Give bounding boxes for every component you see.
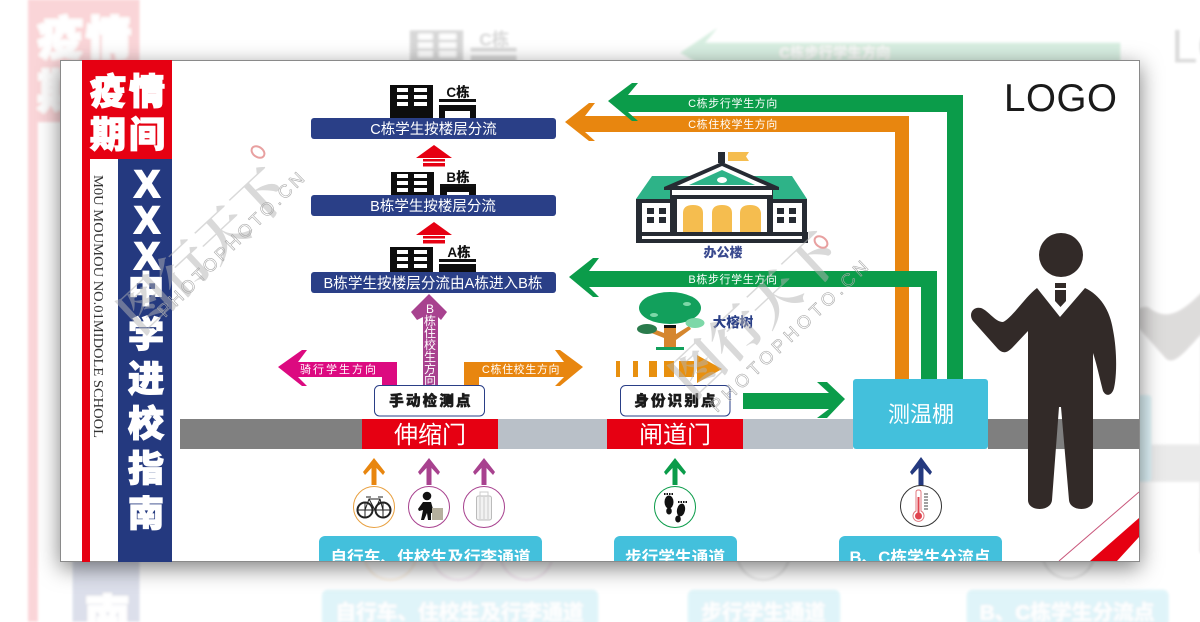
LOGO: LOGO (1004, 77, 1117, 120)
channel: 步行学生通道: 步行学生通道 (625, 547, 725, 567)
arrow: C栋步行 long green route (565, 83, 963, 379)
icon: office building (636, 152, 808, 260)
background: enlarged faded copy of the board: C栋步行学生方向 (780, 46, 891, 61)
arrow: temperature up (910, 457, 932, 486)
channel: 步行学生通道 (614, 536, 737, 561)
background: enlarged faded copy of the board: 疫 (38, 15, 83, 64)
arrow: B栋住校生方向: 栋 (424, 313, 436, 328)
identity check point (620, 386, 730, 416)
sidebar heading: 疫情期间: 疫 (90, 71, 126, 112)
sidebar title: XXX中学进校指南: 指 (128, 448, 164, 489)
icon: footprints (654, 486, 696, 528)
sidebar title: XXX中学进校指南: 进 (128, 358, 164, 399)
building B with label bar (311, 169, 556, 216)
sidebar title: XXX中学进校指南: 南 (128, 493, 164, 534)
watermark 2: 图行天下 (661, 225, 853, 409)
board panel (60, 60, 1140, 562)
arrow: up to building C (416, 145, 452, 166)
gate: 伸缩门 (362, 419, 498, 449)
label: C栋学生按楼层分流 (311, 118, 556, 139)
icon: building A (390, 244, 476, 272)
sidebar english school name: M0U MOUMOU NO.01MIDOLE SCHOOL (91, 175, 106, 438)
sidebar title: XXX中学进校指南: 校 (128, 403, 164, 444)
gate: 伸缩门: 伸缩门 (394, 422, 466, 449)
manual check point: 手动检测点 (389, 392, 473, 410)
channel: 自行车、住校生及行李通道 (319, 536, 542, 561)
arrow: B栋住校生方向: 方 (424, 361, 436, 376)
channel: 自行车、住校生及行李通道: 自行车、住校生及行李通道 (330, 547, 531, 567)
icon: banyan tree (637, 292, 754, 350)
arrow: C栋住校生方向: C栋住校生方向 (482, 362, 560, 376)
label: 大榕树: 大榕树 (713, 314, 754, 330)
icon: thermometer (900, 486, 942, 526)
label: B栋学生按楼层分流由A栋进入B栋: B栋学生按楼层分流由A栋进入B栋 (324, 274, 542, 292)
sidebar title: XXX中学进校指南: X (134, 236, 160, 278)
arrow: B栋住校生方向: 生 (424, 350, 436, 364)
icon: building B: B栋 (446, 169, 470, 185)
arrow: to temperature booth (743, 382, 845, 418)
arrow: C栋步行 long green route: C栋住校学生方向 (688, 117, 778, 131)
bottom channel labels (319, 492, 1139, 561)
arrow: 骑行学生方向: 骑行学生方向 (300, 362, 378, 376)
icon: person with luggage (408, 486, 450, 528)
sidebar heading: 疫情期间: 间 (129, 114, 165, 155)
channel: B、C栋学生分流点 (839, 536, 1002, 561)
label: B栋学生按楼层分流 (311, 195, 556, 216)
arrow: 骑行学生方向 (278, 350, 397, 386)
building C with label bar (311, 84, 556, 139)
sidebar heading: 疫情期间 (82, 60, 172, 159)
temperature booth (853, 379, 988, 449)
arrow: B栋住校生方向: 校 (424, 337, 436, 352)
background: enlarged faded copy of the board: 期 (38, 68, 83, 117)
road band (180, 419, 1139, 449)
label: B栋学生按楼层分流: B栋学生按楼层分流 (370, 197, 496, 215)
watermark 2: PHOTOPHOTO.CN (706, 257, 872, 416)
arrow: walking up (664, 458, 686, 485)
sidebar title: XXX中学进校指南 (128, 164, 164, 534)
label: B栋学生按楼层分流由A栋进入B栋 (311, 272, 556, 293)
arrow: bicycle up (363, 458, 385, 485)
arrow: B栋步行 green route (569, 258, 937, 379)
arrow: B栋住校生方向: 向 (424, 372, 436, 387)
corner diagonal stripes (1059, 492, 1139, 561)
arrow: B栋住校生方向: B (426, 302, 434, 316)
identity check point: 身份识别点 (634, 392, 718, 410)
watermark 1: 图行天下 (109, 161, 301, 345)
label: C栋学生按楼层分流: C栋学生按楼层分流 (370, 120, 497, 138)
arrow: luggage up (473, 458, 495, 485)
sidebar title: XXX中学进校指南: X (134, 164, 160, 206)
watermark 1: PHOTOPHOTO.CN (154, 169, 308, 321)
label: 办公楼: 办公楼 (703, 245, 743, 260)
background: enlarged faded copy of the board: C栋 (479, 29, 509, 49)
sidebar title: XXX中学进校指南: 中 (128, 269, 164, 310)
arrow: B栋住校生方向 (411, 294, 447, 387)
manual check point (374, 386, 484, 416)
gate: 闸道门 (607, 419, 743, 449)
arrow: boarder up (418, 458, 440, 485)
arrow: B栋住校生方向: 住 (424, 326, 436, 340)
background: enlarged faded copy of the board: 情 (86, 15, 131, 64)
temperature booth: 测温棚 (888, 402, 954, 427)
channel: B、C栋学生分流点: B、C栋学生分流点 (850, 547, 991, 567)
icon: building B (391, 169, 476, 195)
gate: 闸道门: 闸道门 (639, 422, 711, 449)
arrow: C栋步行 long green route: C栋步行学生方向 (688, 96, 778, 110)
building A with label bar (311, 244, 556, 293)
icon: building A: A栋 (447, 244, 471, 260)
sidebar heading: 疫情期间: 情 (129, 71, 165, 112)
arrow: up to building B (416, 222, 452, 244)
arrow: dashed orange (616, 355, 722, 383)
icon: presenter silhouette (971, 233, 1116, 509)
sidebar title: XXX中学进校指南: 学 (128, 314, 164, 355)
icon: suitcase (464, 486, 504, 528)
sidebar heading: 疫情期间: 期 (90, 114, 126, 155)
sidebar title: XXX中学进校指南: X (134, 200, 160, 242)
sidebar: school title (82, 60, 172, 562)
arrow: C栋住校生方向 (464, 350, 583, 386)
icon: building C: C栋 (446, 84, 470, 100)
background: enlarged faded copy of the board: 间 (86, 68, 131, 117)
icon: bicycle (354, 486, 394, 528)
arrow: B栋步行 green route: B栋步行学生方向 (688, 272, 778, 286)
icon: building C (390, 84, 476, 118)
